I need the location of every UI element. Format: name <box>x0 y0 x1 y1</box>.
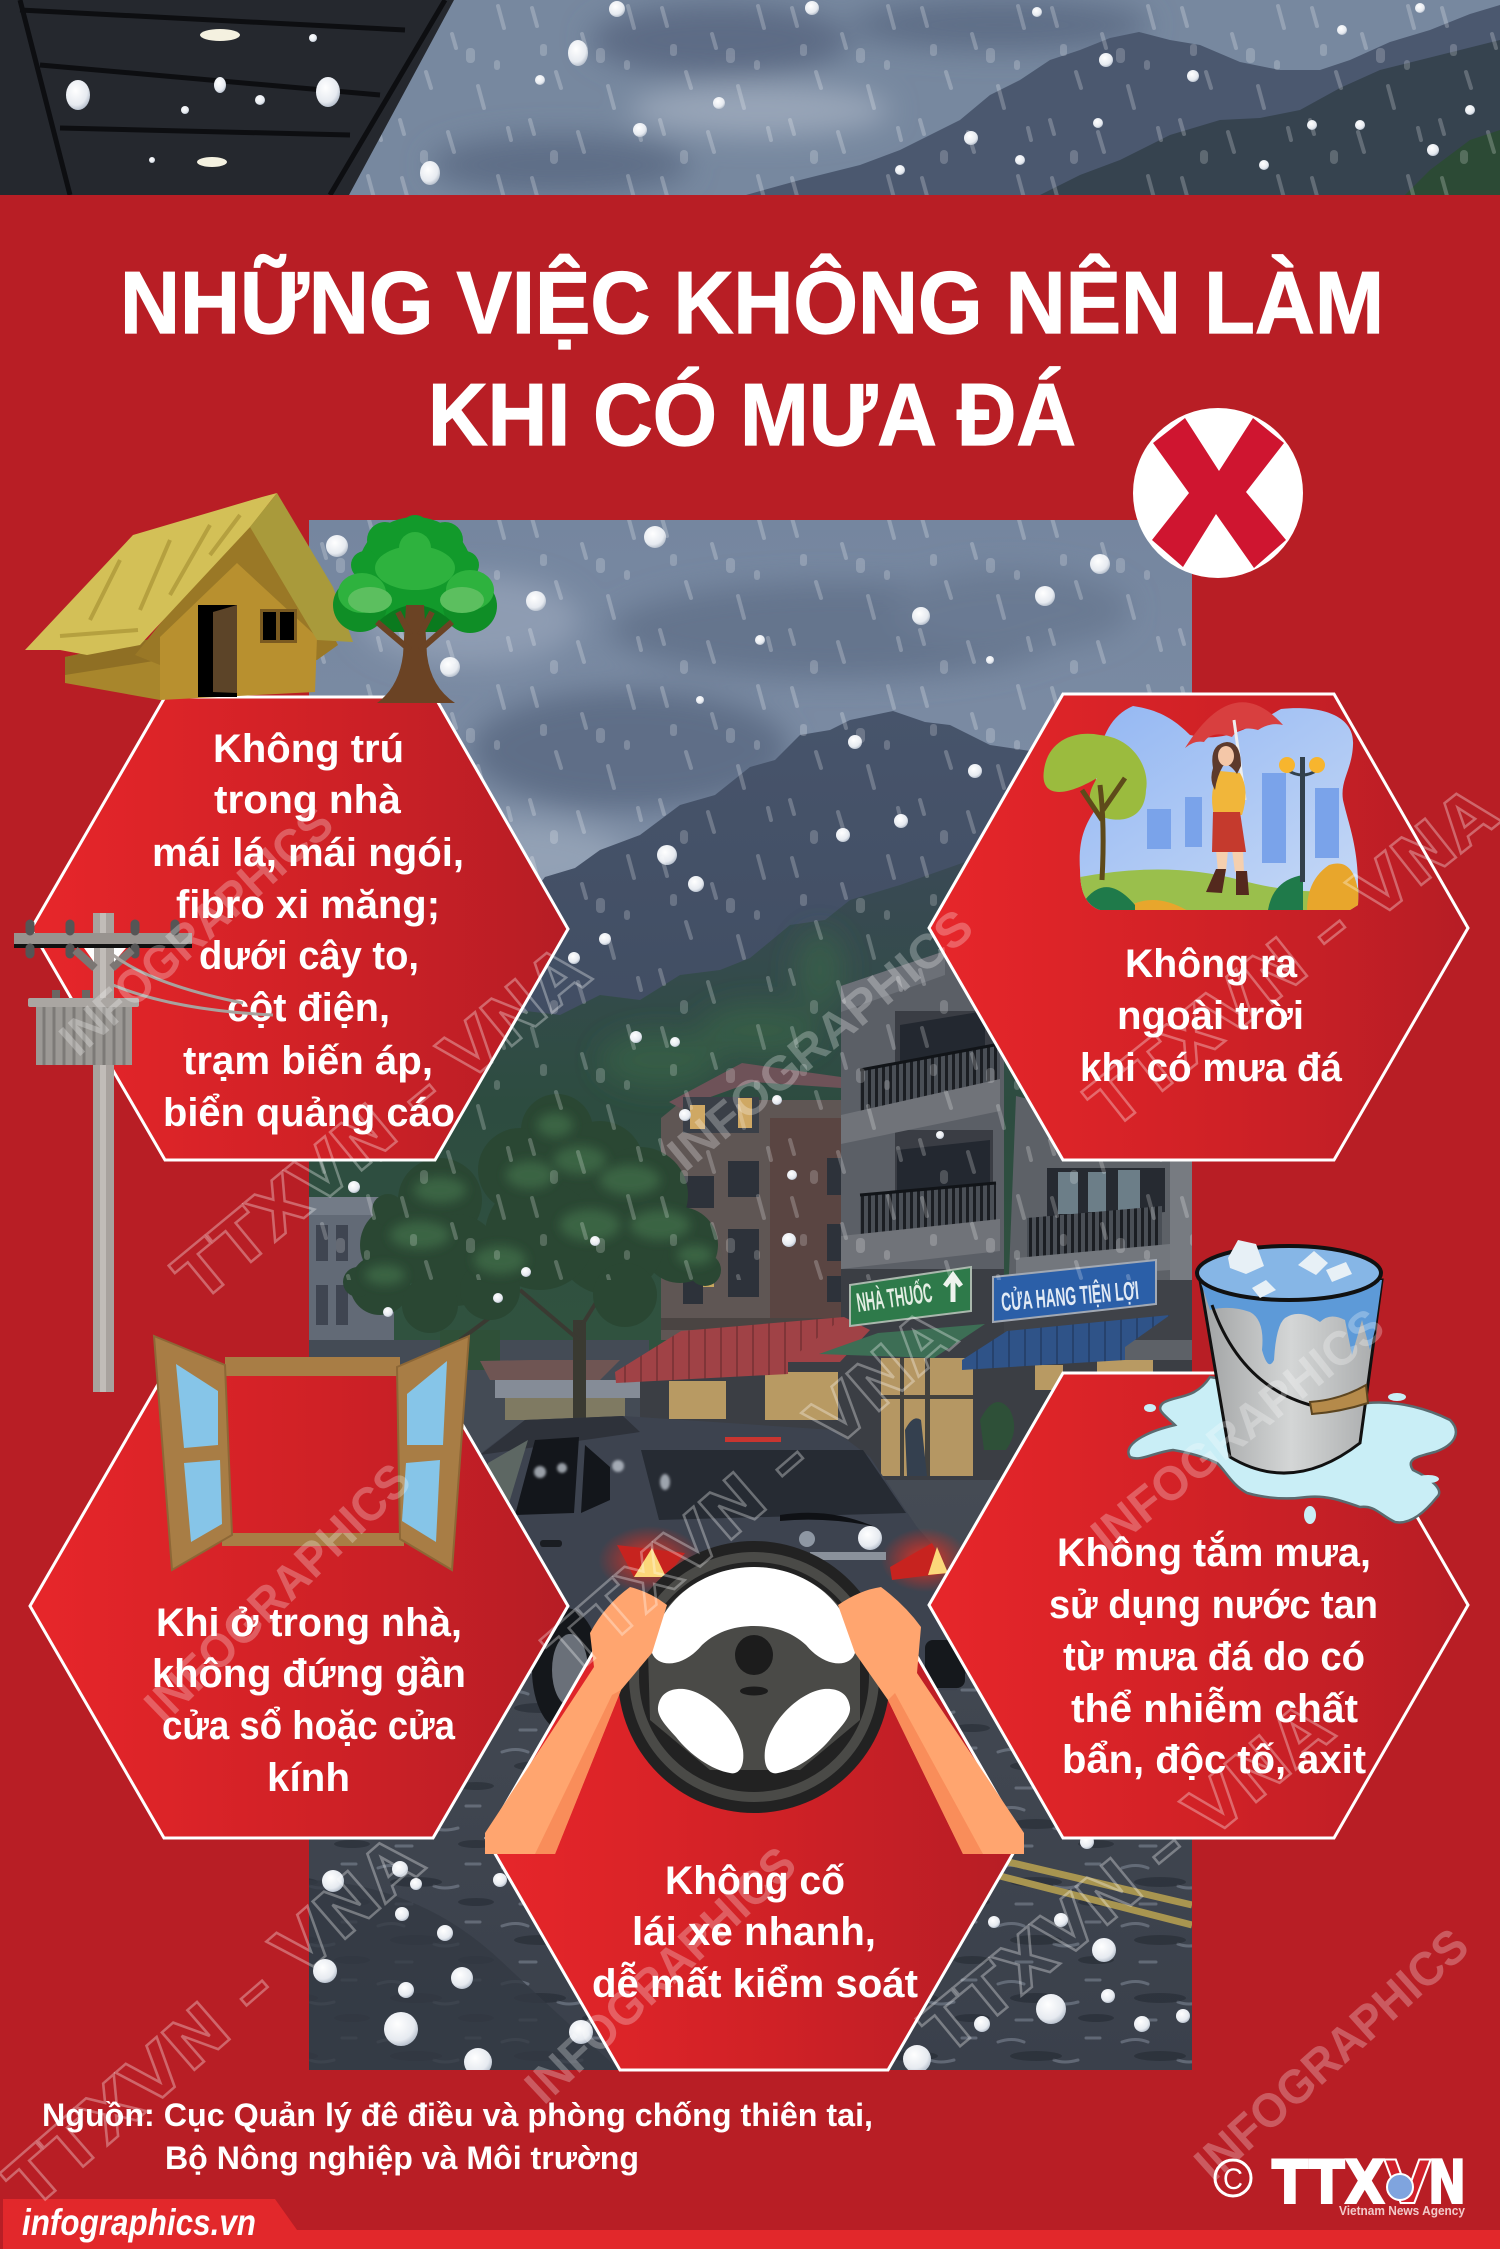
hexagon: do not drive fast: lái xe nhanh, <box>632 1910 876 1954</box>
icon: thatched house <box>25 493 353 700</box>
hexagon: do not shelter in weak buildings: biển quảng cáo <box>163 1091 455 1135</box>
top banner photo: hail over mountains <box>0 0 1500 195</box>
watermarks: INFOGRAPHICS <box>515 1837 807 2114</box>
logo: TTXVN: Vietnam News Agency <box>1339 2203 1466 2218</box>
hexagon: do not shelter in weak buildings: mái lá, mái ngói, <box>152 831 464 875</box>
watermarks: TTXVN – VNA <box>908 1688 1348 2070</box>
watermarks: INFOGRAPHICS <box>1185 1919 1479 2191</box>
car rear view <box>480 1416 969 1732</box>
hexagon: do not shelter in weak buildings: dưới cây to, <box>199 934 419 978</box>
hexagon: do not bathe in rain: từ mưa đá do có <box>1063 1635 1365 1679</box>
hexagon: stay away from windows: Khi ở trong nhà, <box>156 1601 462 1645</box>
watermarks: TTXVN – VNA <box>160 931 604 1317</box>
watermarks: INFOGRAPHICS <box>50 796 344 1066</box>
hexagon: do not bathe in rain: bẩn, độc tố, axit <box>1062 1738 1366 1782</box>
hexagon: do not drive fast: Không cố <box>665 1859 845 1903</box>
watermarks <box>0 772 1500 2224</box>
watermarks: INFOGRAPHICS <box>1082 1299 1394 1563</box>
title: NHỮNG VIỆC KHÔNG NÊN LÀM <box>120 253 1384 352</box>
hailstones in photo <box>313 526 1190 2076</box>
watermarks: INFOGRAPHICS <box>135 1454 421 1733</box>
right building <box>1004 1096 1192 1360</box>
watermarks: TTXVN – VNA <box>531 1294 971 1691</box>
icon: green tree <box>333 515 497 703</box>
main street tree <box>343 1094 721 1420</box>
hexagon: stay away from windows: kính <box>267 1756 350 1800</box>
hexagon: do not shelter in weak buildings: trong nhà <box>214 778 402 822</box>
watermarks: INFOGRAPHICS <box>658 900 983 1181</box>
hailstones banner <box>66 1 1475 185</box>
hexagon: stay away from windows <box>30 1374 568 1838</box>
icon: woman with umbrella in the rain <box>1040 700 1370 915</box>
hexagon: do not shelter in weak buildings: cột điện, <box>227 986 390 1030</box>
hexagon: do not go outside: khi có mưa đá <box>1080 1046 1343 1090</box>
footer band: infographics.vn <box>22 2202 256 2243</box>
logo: TTXVN <box>1215 2148 1466 2218</box>
hexagon: do not shelter in weak buildings <box>31 697 568 1160</box>
shop signs <box>850 1260 1156 1326</box>
hexagon: do not bathe in rain: Không tắm mưa, <box>1057 1529 1371 1575</box>
source note <box>42 2097 873 2176</box>
hexagon: do not drive fast <box>486 1606 1022 2070</box>
title: KHI CÓ MƯA ĐÁ <box>428 365 1076 464</box>
hexagon: do not drive fast: dễ mất kiểm soát <box>592 1960 918 2006</box>
hexagon: do not go outside <box>929 694 1468 1160</box>
source note: Bộ Nông nghiệp và Môi trường <box>165 2140 639 2176</box>
icon: bucket with ice and puddle <box>1128 1240 1456 1524</box>
source note: Nguồn: Cục Quản lý đê điều và phòng chống thiên tai, <box>42 2097 873 2133</box>
footer band <box>3 2199 1500 2249</box>
hexagon: do not go outside: Không ra <box>1125 942 1298 986</box>
hexagon: do not bathe in rain <box>929 1373 1468 1838</box>
hexagon: stay away from windows: cửa sổ hoặc cửa <box>162 1704 456 1748</box>
watermarks: TTXVN – VNA <box>0 1821 438 2224</box>
shop signs: NHÀ THUỐC <box>854 1276 934 1318</box>
ceiling overhang <box>0 0 454 195</box>
hexagon: do not bathe in rain: thể nhiễm chất <box>1071 1685 1358 1731</box>
icon: steering wheel with hands <box>485 1541 1024 1854</box>
hexagon: do not shelter in weak buildings: trạm biến áp, <box>183 1039 433 1083</box>
logo: TTXVN: N <box>1428 2148 1466 2218</box>
background building and shops <box>309 1197 649 1480</box>
logo: TTXVN: V <box>1384 2148 1432 2218</box>
title <box>120 253 1384 464</box>
shop signs: CỬA HANG TIỆN LỢI <box>1000 1274 1140 1317</box>
icon: red cross in white circle <box>1133 408 1303 578</box>
right arm <box>838 1587 1024 1854</box>
left arm <box>485 1587 667 1854</box>
icon: electric pole and transformer <box>14 913 273 1392</box>
icon: open window <box>154 1336 469 1570</box>
road <box>309 1480 1192 2070</box>
hexagon: do not go outside: ngoài trời <box>1117 994 1304 1038</box>
mountain and forest <box>309 711 1029 1351</box>
sky with clouds <box>309 520 1192 881</box>
hexagon: stay away from windows: không đứng gần <box>152 1652 466 1696</box>
shop fronts and awnings <box>615 1315 1192 1485</box>
hexagon: do not bathe in rain: sử dụng nước tan <box>1049 1583 1378 1627</box>
logo: TTXVN: C <box>1223 2163 1243 2196</box>
logo: TTXVN: TTX <box>1272 2148 1385 2218</box>
brown building <box>661 1063 844 1340</box>
central photo: hailstorm street scene <box>309 520 1192 2076</box>
hexagon: do not shelter in weak buildings: Không trú <box>213 727 404 771</box>
hexagon: do not shelter in weak buildings: fibro xi măng; <box>176 883 440 927</box>
grey building <box>841 952 1004 1360</box>
